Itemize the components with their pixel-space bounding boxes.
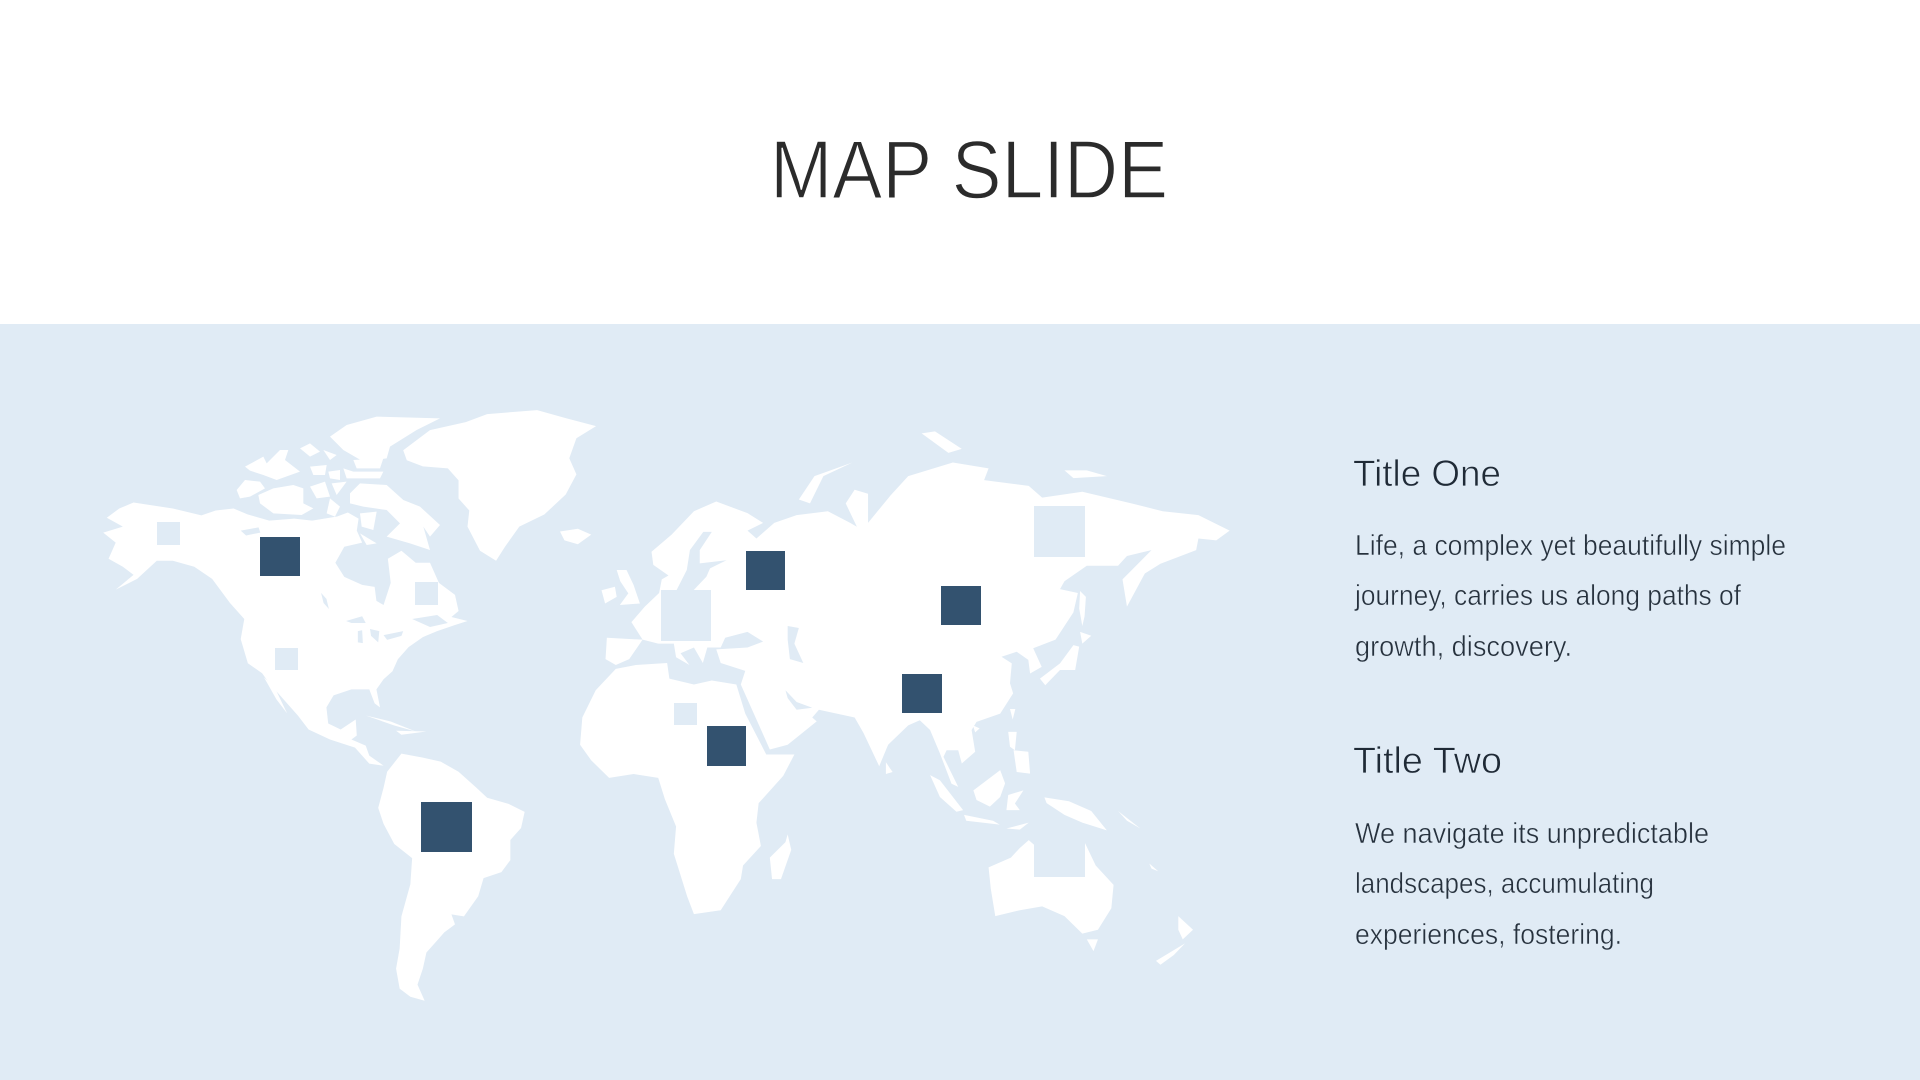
- South America: [378, 754, 525, 1001]
- Greenland: [403, 410, 596, 561]
- map: Europe, Africa, Asia and Oceania: [560, 431, 1230, 965]
- marker: Siberia: [1034, 506, 1085, 557]
- Iceland: [560, 529, 591, 544]
- inland seas: [677, 532, 812, 710]
- marker: North Africa: [674, 703, 697, 725]
- title: MAP SLIDE: [770, 123, 1168, 216]
- body: Title Two: We navigate its unpredictable: [1355, 818, 1709, 850]
- text block: Title Two: [1353, 740, 1709, 951]
- marker: Quebec: [415, 582, 438, 605]
- marker: Russia: [746, 551, 785, 590]
- Australia: [989, 840, 1114, 934]
- body: Title One: growth, discovery.: [1355, 631, 1572, 663]
- map: Canadian Arctic islands: [237, 417, 440, 550]
- heading: Title Two: Title Two: [1353, 740, 1502, 781]
- Baja California: [264, 677, 287, 713]
- Caribbean islands: [366, 715, 416, 732]
- Indonesia and New Guinea: [930, 775, 963, 812]
- text block: Title One: [1353, 453, 1786, 663]
- North America: [103, 502, 467, 766]
- marker: Europe: [661, 590, 711, 641]
- marker: Brazil: [421, 802, 472, 852]
- Madagascar: [770, 834, 791, 879]
- marker: India: [902, 674, 942, 713]
- marker: United States: [275, 648, 298, 670]
- East Asian islands: [1079, 591, 1086, 626]
- body: Title One: [1354, 530, 1786, 663]
- marker: Alaska: [157, 522, 180, 545]
- heading: Title One: Title One: [1353, 453, 1501, 494]
- marker: Canada: [260, 537, 300, 576]
- marker: Mongolia: [941, 586, 981, 625]
- New Zealand: [1156, 943, 1185, 965]
- world map: [103, 410, 1230, 1001]
- Africa: [580, 663, 794, 914]
- body: Title Two: experiences, fostering.: [1355, 919, 1622, 951]
- Arctic Russian islands: [922, 431, 962, 453]
- pale markers: [157, 506, 1085, 877]
- body: Title Two: [1355, 818, 1709, 951]
- body: Title One: Life, a complex yet beautifully simple: [1355, 530, 1786, 562]
- lakes: [241, 527, 448, 643]
- Eurasia: [606, 463, 1230, 787]
- marker: Australia: [1034, 826, 1085, 877]
- marker: Sudan: [707, 726, 746, 766]
- dark markers: [260, 537, 981, 852]
- body: Title One: journey, carries us along paths of: [1354, 580, 1742, 612]
- body: Title Two: landscapes, accumulating: [1355, 868, 1654, 900]
- map: Americas and Greenland: [103, 410, 596, 1001]
- UK and Ireland: [617, 570, 640, 605]
- panel: map and text background band: [0, 324, 1920, 1080]
